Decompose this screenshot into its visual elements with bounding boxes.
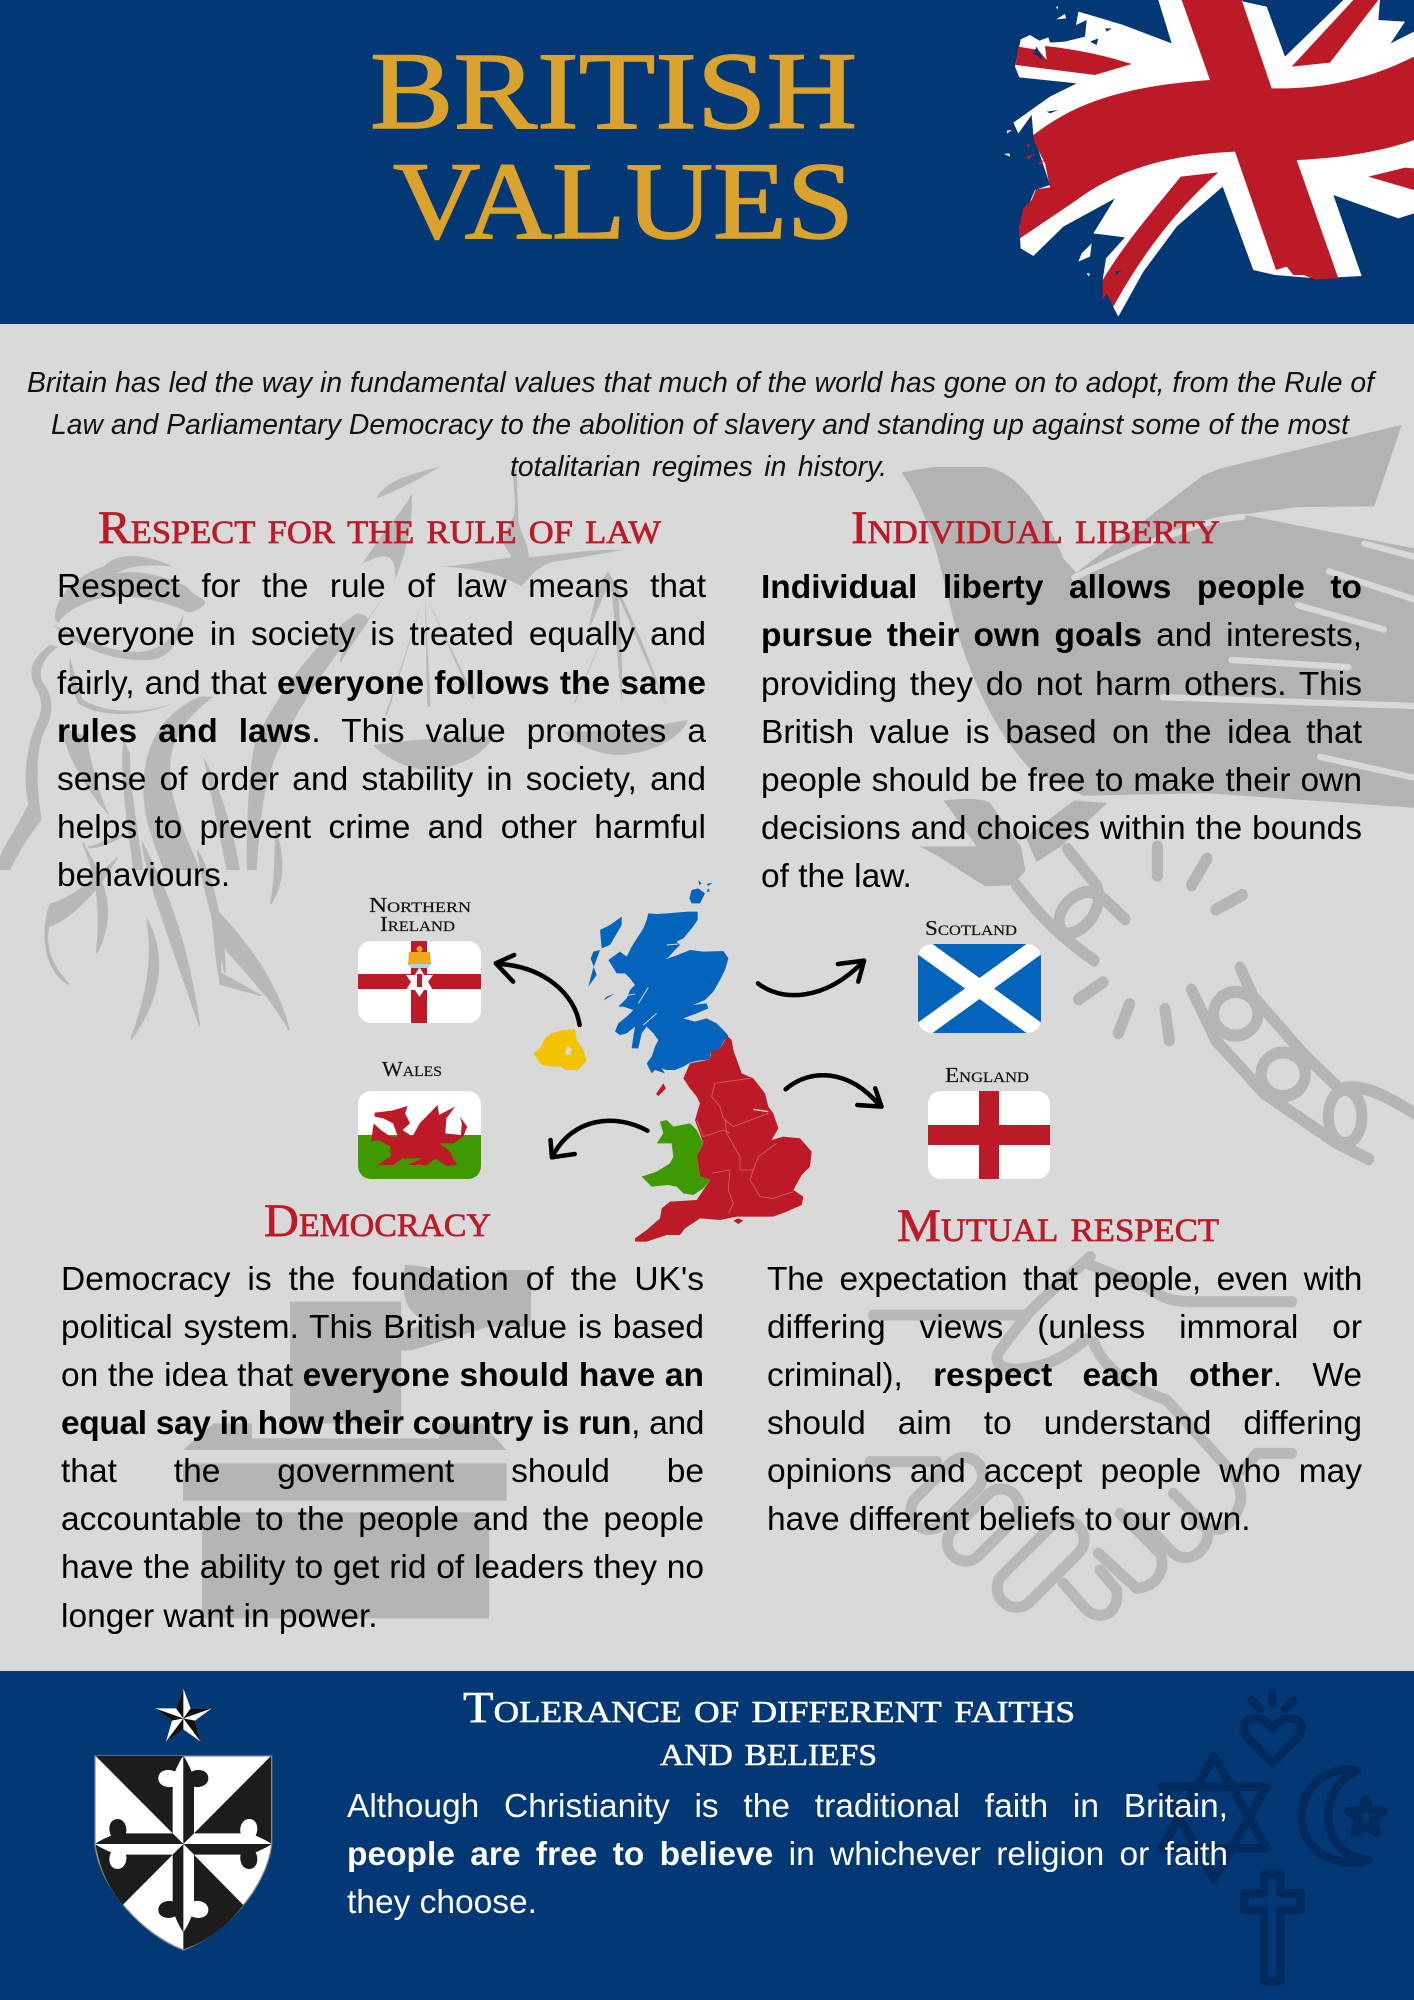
label: Northern Ireland xyxy=(369,893,471,936)
heading: mutual respect: Mutual respect xyxy=(897,1200,1219,1252)
icon: brushed union jack flag xyxy=(1004,0,1414,317)
text: tolerance of faiths xyxy=(347,1788,1228,1921)
icons: faith symbols xyxy=(1162,1693,1383,1982)
icon: map of the United Kingdom xyxy=(533,880,812,1242)
text: respect for the rule of law: rules and laws. This value promotes a xyxy=(57,713,706,750)
text: democracy: Democracy is the foundation of the UK's xyxy=(61,1261,704,1298)
text: democracy: longer want in power. xyxy=(61,1598,378,1635)
icon: crescent and star xyxy=(1302,1770,1383,1862)
arrow: to Northern Ireland flag xyxy=(496,955,580,1025)
text: tolerance of faiths: people are free to believe in whichever religion or faith xyxy=(347,1836,1228,1873)
text: democracy: have the ability to get rid of leaders they no xyxy=(61,1549,704,1586)
flag: Northern Ireland xyxy=(358,941,481,1023)
icon: shield crest with star xyxy=(95,1688,272,1950)
watermark: handshake xyxy=(870,1257,1292,1615)
text: respect for the rule of law: fairly, and that everyone follows the same xyxy=(57,665,706,702)
map region: Wales xyxy=(642,1120,710,1195)
text: mutual respect: criminal), respect each other. We xyxy=(767,1357,1362,1394)
shield xyxy=(95,1756,272,1950)
text: Law and Parliamentary Democracy to the abolition of slavery and standing up against some of the most xyxy=(51,408,1349,440)
text: individual liberty: of the law. xyxy=(761,858,912,895)
heading: tolerance of different faiths and beliefs xyxy=(463,1683,1075,1775)
text: mutual respect: have different beliefs to our own. xyxy=(767,1501,1251,1538)
heading: democracy: Democracy xyxy=(264,1195,491,1247)
heading: tolerance of different faiths and beliefs: and beliefs xyxy=(660,1726,877,1775)
heading: tolerance of different faiths and beliefs: Tolerance of different faiths xyxy=(463,1683,1075,1732)
text: democracy: that the government should be xyxy=(61,1453,704,1490)
text: respect for the rule of law: helps to prevent crime and other harmful xyxy=(57,809,706,846)
text: individual liberty: British value is based on the idea that xyxy=(761,714,1362,751)
text: respect for the rule of law: behaviours. xyxy=(57,857,230,894)
text: individual liberty: pursue their own goals and interests, xyxy=(761,617,1362,654)
text: democracy: on the idea that everyone should have an xyxy=(61,1357,704,1394)
heading: respect for the rule of law: Respect for the rule of law xyxy=(98,502,662,554)
text: mutual respect: should aim to understand differing xyxy=(767,1405,1362,1442)
star above shield xyxy=(155,1688,212,1742)
intro paragraph xyxy=(27,366,1376,482)
watermark: dove xyxy=(902,425,1414,886)
text: democracy xyxy=(61,1261,704,1635)
label: Wales: Wales xyxy=(382,1057,442,1081)
text: individual liberty: Individual liberty allows people to xyxy=(761,569,1362,606)
text: individual liberty: providing they do not harm others. This xyxy=(761,666,1362,703)
watermark: ballot box xyxy=(183,1265,531,1618)
text: totalitarian regimes in history. xyxy=(510,450,887,482)
text: democracy: accountable to the people and the people xyxy=(61,1501,704,1538)
map region: England xyxy=(635,1036,812,1242)
label: England: England xyxy=(945,1063,1029,1087)
title: VALUES xyxy=(393,140,854,262)
text: respect for the rule of law: Respect for the rule of law means that xyxy=(57,568,706,605)
text: democracy: equal say in how their country is run, and xyxy=(61,1405,704,1442)
text: mutual respect xyxy=(767,1261,1362,1538)
flag: Wales xyxy=(358,1091,481,1179)
arrow: to England flag xyxy=(786,1075,882,1107)
icon: sacred heart xyxy=(1244,1693,1302,1763)
title xyxy=(370,30,857,262)
arrow: to Scotland flag xyxy=(758,961,864,995)
text: Britain has led the way in fundamental values that much of the world has gone on to adopt, from the Rule of xyxy=(27,366,1374,398)
footer band xyxy=(0,1671,1414,2000)
map region: Scotland xyxy=(588,880,728,1073)
label: Northern Ireland: Northern xyxy=(369,893,471,917)
text: respect for the rule of law xyxy=(57,568,706,894)
text: mutual respect: The expectation that people, even with xyxy=(767,1261,1362,1298)
header band xyxy=(0,0,1414,324)
label: Scotland: Scotland xyxy=(925,916,1017,940)
watermark: lady justice xyxy=(0,556,365,1040)
text: respect for the rule of law: everyone in society is treated equally and xyxy=(57,616,706,653)
text: respect for the rule of law: sense of order and stability in society, and xyxy=(57,761,706,798)
watermark: broken chain xyxy=(1017,847,1414,1159)
text: tolerance of faiths: Although Christianity is the traditional faith in Britain, xyxy=(347,1788,1228,1824)
label: Northern Ireland: Ireland xyxy=(380,912,455,936)
title: BRITISH xyxy=(370,30,857,152)
text: mutual respect: opinions and accept people who may xyxy=(767,1453,1362,1490)
flag: England xyxy=(928,1091,1050,1179)
icon: star of David xyxy=(1162,1756,1267,1878)
map region: Northern Ireland xyxy=(533,1029,587,1070)
arrow: to Wales flag xyxy=(551,1121,647,1157)
text: democracy: political system. This British value is based xyxy=(61,1309,704,1346)
watermark: scales of justice xyxy=(340,467,688,770)
text: individual liberty: people should be free to make their own xyxy=(761,762,1362,799)
text: individual liberty xyxy=(761,569,1362,895)
flag: Scotland xyxy=(918,944,1041,1033)
text: mutual respect: differing views (unless immoral or xyxy=(767,1309,1362,1346)
icon: cross xyxy=(1244,1874,1301,1982)
text: tolerance of faiths: they choose. xyxy=(347,1884,537,1921)
heading: individual liberty: Individual liberty xyxy=(851,502,1220,554)
text: individual liberty: decisions and choices within the bounds xyxy=(761,810,1362,847)
